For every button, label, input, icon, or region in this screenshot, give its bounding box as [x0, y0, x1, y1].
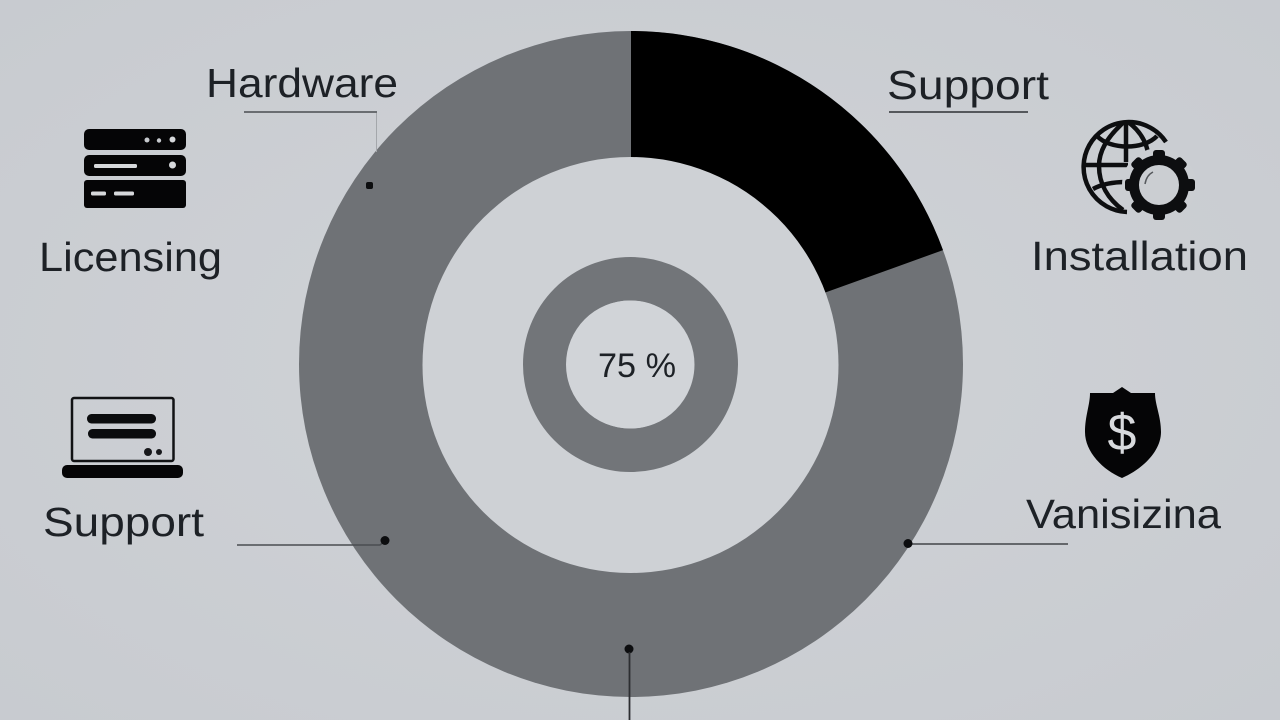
leader line — [628, 652, 630, 720]
globe — [1084, 121, 1166, 212]
label: Hardware (top left) — [206, 60, 398, 189]
label: Support (bottom left) — [43, 499, 390, 545]
leader dot — [624, 644, 634, 654]
base — [62, 465, 183, 478]
ring segment: grey majority — [299, 31, 963, 697]
text bars — [87, 414, 156, 424]
label text: Vanisizina — [1026, 491, 1221, 537]
centre gauge ring with value — [545, 279, 716, 450]
icon: laptop — [62, 398, 183, 478]
status dots — [144, 448, 152, 456]
leader line — [244, 111, 377, 113]
donut chart: outer ring — [299, 31, 963, 697]
leader dot — [380, 536, 390, 545]
icon: globe with gear — [1084, 121, 1196, 222]
leader dot — [904, 539, 912, 548]
ring segment: black slice — [631, 31, 943, 364]
inner ring hole — [566, 300, 694, 428]
bottom leader — [624, 644, 634, 720]
centre value: 75 % — [598, 347, 676, 385]
label text: Support — [887, 62, 1050, 108]
inner ring — [545, 279, 716, 450]
label text: Support — [43, 499, 205, 545]
gear halo — [1122, 148, 1196, 222]
label text: Hardware — [206, 60, 398, 106]
leader vertical — [376, 113, 378, 152]
icon: server stack — [84, 129, 186, 208]
label: Installation: Installation — [1031, 233, 1248, 279]
icon: shield with dollar — [1085, 387, 1161, 478]
label: Vanisizina with leader — [904, 491, 1221, 548]
label: Licensing: Licensing — [39, 234, 222, 280]
screen — [72, 398, 174, 461]
leader line — [237, 541, 385, 545]
leader line — [908, 543, 1068, 545]
gear — [1125, 150, 1195, 220]
ring hole — [422, 157, 838, 573]
icon: shield with dollar: $ — [1108, 404, 1137, 462]
leader dot — [366, 182, 373, 189]
leader line — [889, 111, 1028, 113]
